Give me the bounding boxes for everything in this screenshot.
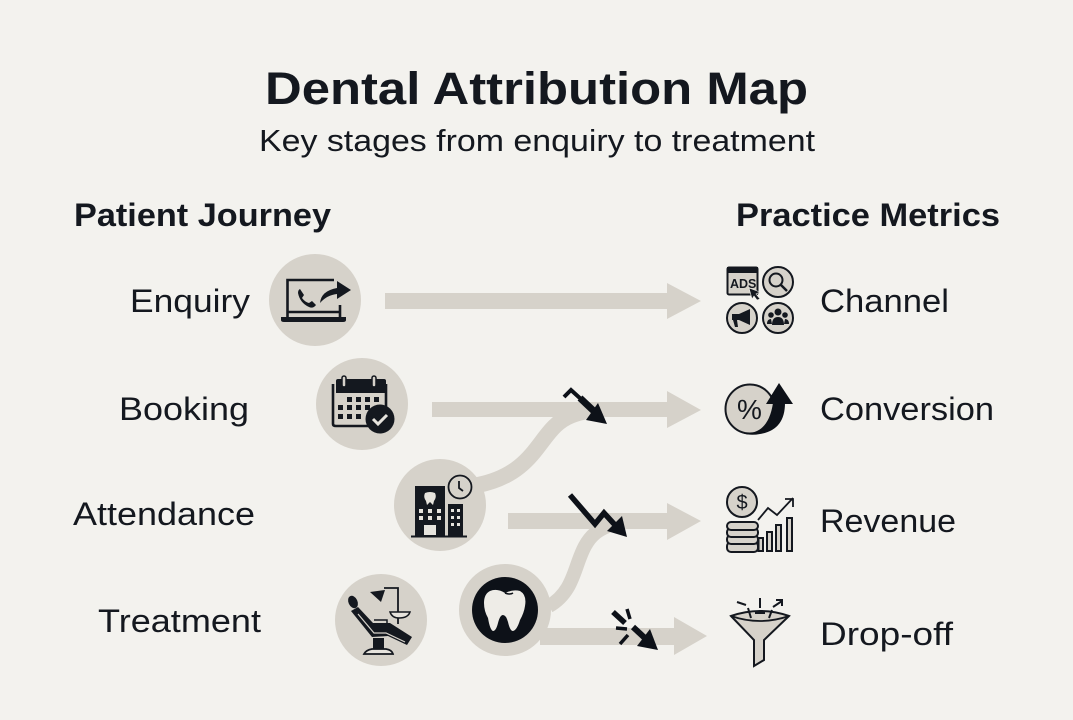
dollar sign: $: [736, 492, 748, 514]
label: channel: Channel: [820, 283, 949, 319]
arrow: enquiry to channel: [385, 283, 701, 319]
connector: attendance to conversion: [478, 410, 592, 485]
label: treatment: Treatment: [98, 603, 261, 639]
label: attendance: Attendance: [73, 496, 255, 532]
label: drop-off: Drop-off: [820, 616, 953, 652]
ads text: ADS: [730, 277, 756, 291]
icon: enquiry laptop with call: [269, 254, 361, 346]
arrow: booking to conversion: [432, 391, 701, 428]
subtitle: Key stages from enquiry to treatment: [259, 123, 815, 158]
icon: booking calendar with check: [316, 358, 408, 450]
icon: drop-off funnel: [731, 598, 789, 666]
icon: black broken arrow on drop-off line: [613, 609, 658, 650]
icon: conversion percent with up arrow: [726, 383, 793, 435]
icon: attendance clinic building with clock: [394, 459, 486, 551]
connector: tooth to revenue: [549, 526, 608, 606]
icon: treatment dental chair: [335, 574, 427, 666]
heading: practice metrics: Practice Metrics: [736, 197, 1000, 233]
icon: channel ads, search, megaphone, audience: [727, 267, 793, 333]
title: Dental Attribution Map: [265, 63, 808, 114]
label: conversion: Conversion: [820, 391, 994, 427]
arrow: attendance to revenue: [508, 503, 701, 540]
arrow: tooth to drop-off: [540, 617, 707, 655]
label: enquiry: Enquiry: [130, 283, 250, 319]
icon: black zigzag arrow on revenue line: [570, 495, 627, 537]
icon: revenue coins and chart: [727, 487, 793, 552]
label: revenue: Revenue: [820, 503, 956, 539]
percent sign: %: [737, 394, 762, 425]
heading: patient journey: Patient Journey: [74, 197, 331, 233]
icon: tooth in dark circle: [459, 564, 551, 656]
icon: black drop arrow on booking line: [564, 390, 607, 424]
label: booking: Booking: [119, 391, 249, 427]
